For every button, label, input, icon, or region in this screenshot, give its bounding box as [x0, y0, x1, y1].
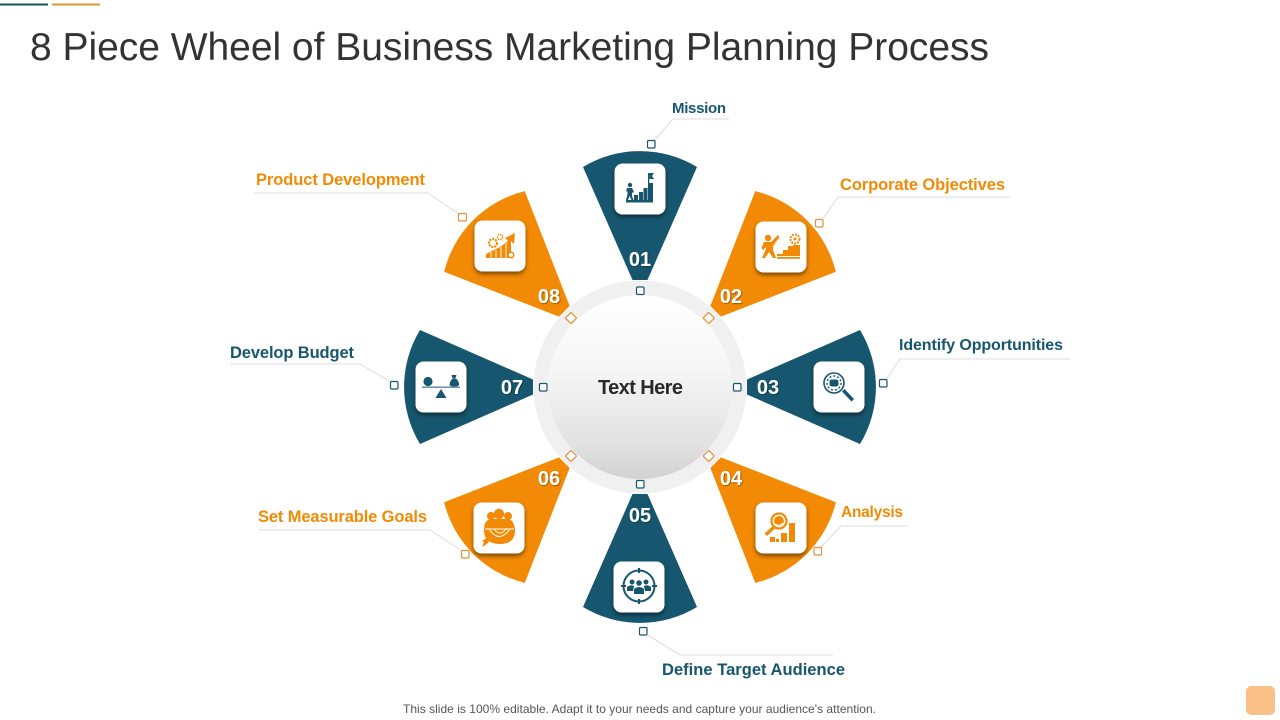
callout: Define Target Audience: Define Target Audience	[662, 661, 845, 679]
sector 03	[747, 330, 876, 444]
title: 8 Piece Wheel of Business Marketing Planning Process	[30, 26, 989, 69]
hub text: Text Here	[598, 377, 683, 399]
number 06: 06	[538, 468, 560, 490]
center hub	[534, 280, 746, 494]
callout: Product Development: Product Development	[256, 171, 426, 189]
sector 04	[675, 422, 847, 594]
number 07: 07	[501, 377, 523, 399]
footer note: This slide is 100% editable. Adapt it to your needs and capture your audience's attention.	[403, 702, 876, 716]
sector 07	[404, 330, 533, 444]
sector 02	[675, 180, 847, 352]
callout: Identify Opportunities	[880, 337, 1070, 387]
corner badge	[1246, 686, 1275, 715]
callout: Corporate Objectives: Corporate Objectives	[840, 176, 1005, 194]
callout: Develop Budget	[230, 344, 398, 389]
icon: audience in crosshair	[614, 562, 664, 612]
number 05: 05	[629, 505, 651, 527]
sector 01	[583, 151, 697, 280]
callout: Mission: Mission	[672, 100, 726, 117]
callout: Define Target Audience	[640, 628, 845, 679]
icon: magnifier with virus	[814, 362, 864, 412]
callout: Corporate Objectives	[816, 176, 1010, 227]
icon: team on target	[474, 502, 524, 554]
icon: person and stairs to goal	[756, 222, 806, 272]
number 03: 03	[757, 377, 779, 399]
number 08: 08	[538, 286, 560, 308]
number 04: 04	[720, 468, 743, 490]
inner markers	[540, 287, 741, 488]
callout: Develop Budget: Develop Budget	[230, 344, 354, 362]
callout: Identify Opportunities: Identify Opportunities	[899, 337, 1063, 354]
icon: climbing bars and flag	[614, 164, 666, 214]
callout: Analysis: Analysis	[841, 504, 903, 521]
sector 06	[433, 422, 605, 594]
top accent bars	[0, 4, 100, 6]
number 02: 02	[720, 286, 742, 308]
callout: Set Measurable Goals	[258, 508, 469, 558]
icon: growth chart with gears	[474, 220, 526, 272]
sector 05	[583, 494, 697, 623]
callout: Analysis	[814, 504, 908, 555]
callout: Product Development	[254, 171, 466, 221]
number 01: 01	[629, 249, 651, 271]
icon: magnifier and bars	[756, 502, 806, 554]
callout: Mission	[648, 100, 729, 148]
icon: balance of time and money	[416, 362, 466, 412]
callout: Set Measurable Goals: Set Measurable Goals	[258, 508, 427, 526]
sector 08	[433, 180, 605, 352]
